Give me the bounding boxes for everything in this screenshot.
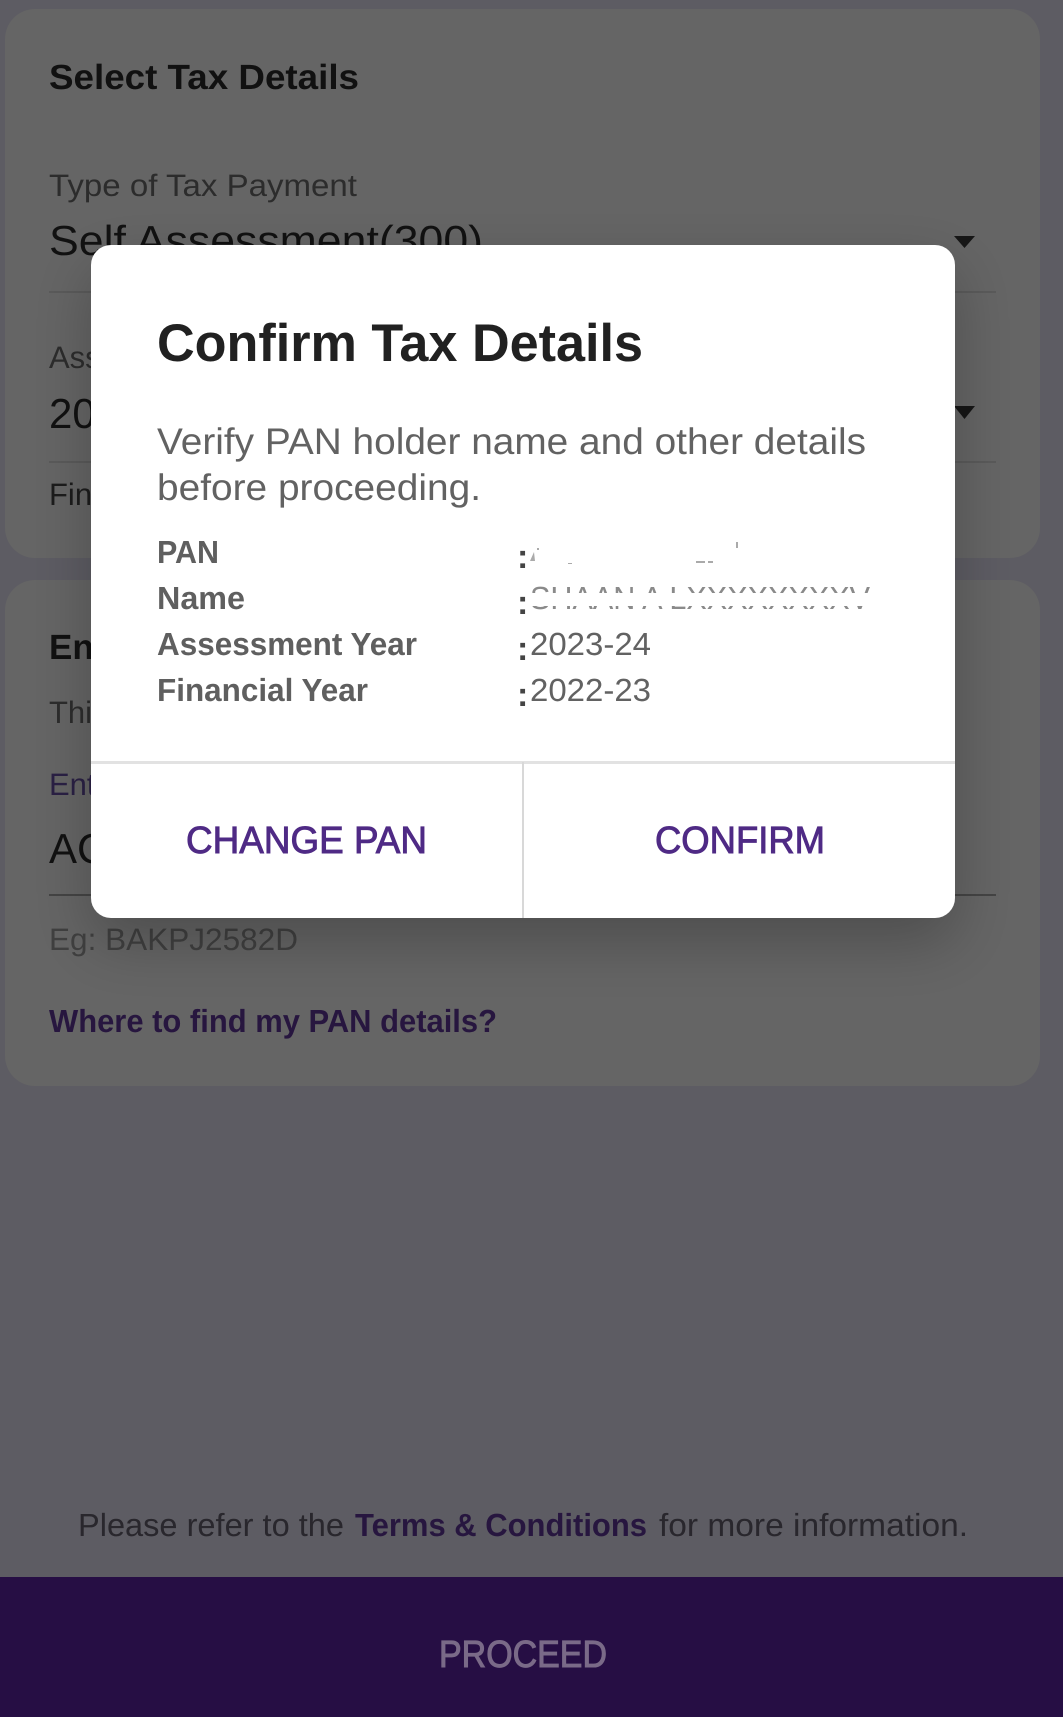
dialog: confirm tax details <box>91 245 955 918</box>
row: assessment year: Assessment Year <box>157 626 417 662</box>
row: financial year: Financial Year <box>157 672 368 708</box>
dialog description: Verify PAN holder name and other details <box>157 421 866 462</box>
heading: enter pan: Enter PAN <box>49 628 220 667</box>
panel: select tax details <box>5 9 1040 558</box>
proceed button bar <box>0 1577 1063 1717</box>
row: name: Name <box>157 580 245 616</box>
terms and conditions note: Please refer to the <box>78 1507 344 1543</box>
field label: enter pan: Enter PAN <box>49 767 193 802</box>
row: financial year: 2022-23 <box>530 672 651 708</box>
row: assessment year: 2023-24 <box>530 626 651 662</box>
field label: type of tax payment: Type of Tax Payment <box>49 168 357 203</box>
row: name: SHAAN A LXXXXXXXXV <box>530 580 871 616</box>
field label: assessment year: Assessment Year <box>49 340 289 375</box>
field value: self assessment: Self Assessment(300) <box>49 217 483 264</box>
field note: financial year: Financial Year <box>49 477 244 512</box>
terms and conditions note <box>78 1507 968 1543</box>
link: where to find pan details: Where to find my PAN details? <box>49 1003 497 1039</box>
row: name: : <box>517 584 528 622</box>
row: pan <box>157 534 738 576</box>
field value: assessment year: 2023-24 <box>49 390 203 437</box>
dialog description <box>157 421 866 508</box>
row: assessment year <box>157 626 651 668</box>
row: assessment year: : <box>517 630 528 668</box>
description text: This <box>49 695 108 730</box>
dialog description: before proceeding. <box>157 467 481 508</box>
terms and conditions note: Terms & Conditions <box>355 1507 647 1543</box>
button: change pan: CHANGE PAN <box>186 820 427 862</box>
hint: example pan: Eg: BAKPJ2582D <box>49 922 298 957</box>
icon: dropdown arrow <box>954 236 975 248</box>
row: name <box>157 580 872 622</box>
heading: select tax details: Select Tax Details <box>49 58 359 97</box>
row: financial year <box>157 672 651 714</box>
terms and conditions note: for more information. <box>659 1507 968 1543</box>
panel: enter pan <box>5 580 1040 1086</box>
row: pan: PAN <box>157 534 219 570</box>
field value: pan: AC <box>49 825 107 872</box>
dialog title: Confirm Tax Details <box>157 314 643 373</box>
icon: dropdown arrow <box>954 406 975 419</box>
row: financial year: : <box>517 676 528 714</box>
row: pan: : <box>517 538 528 576</box>
proceed button bar: PROCEED <box>439 1634 607 1676</box>
button: confirm: CONFIRM <box>655 820 825 862</box>
